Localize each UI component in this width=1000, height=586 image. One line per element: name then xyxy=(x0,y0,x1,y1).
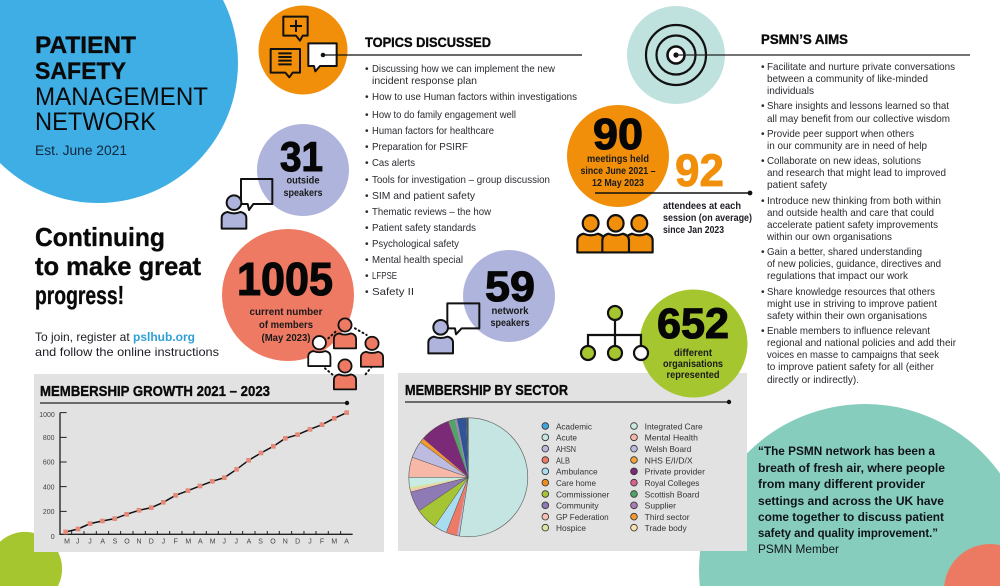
legend: Community xyxy=(556,501,599,511)
topics heading: TOPICS DISCUSSED xyxy=(365,35,491,50)
aims list: patient safety xyxy=(767,180,828,191)
aims list: • xyxy=(761,129,765,140)
title: MANAGEMENT xyxy=(35,83,208,111)
stat: 92 attendees: attendees at each xyxy=(663,201,741,212)
legend: Mental Health xyxy=(645,433,698,443)
line chart: 800 xyxy=(43,435,55,442)
quote: settings and across the UK have xyxy=(758,494,944,508)
topics list: • xyxy=(365,175,369,186)
heading: membership by sector xyxy=(405,382,731,404)
line chart: 600 xyxy=(43,460,55,467)
stat: 92 attendees xyxy=(595,145,752,236)
topics list: Preparation for PSIRF xyxy=(372,142,468,153)
legend: Trade body xyxy=(645,523,687,533)
quote: PSMN Member xyxy=(758,542,839,556)
aims list: • xyxy=(761,101,765,112)
heading: membership growth: MEMBERSHIP GROWTH 2021 – 2023 xyxy=(40,383,270,400)
aims list xyxy=(761,62,957,386)
topics list: • xyxy=(365,64,369,75)
stat: 59 network speakers: network xyxy=(492,306,529,317)
stat: 1005 members: of members xyxy=(259,320,313,331)
stat: 31 outside speakers xyxy=(222,124,349,229)
quote xyxy=(758,444,945,556)
headline: continuing progress: to make great xyxy=(35,251,201,281)
stat: 90 meetings: 12 May 2023 xyxy=(592,178,644,189)
icon: speech bubbles xyxy=(271,17,337,77)
line chart: F xyxy=(320,538,324,545)
topics list: SIM and patient safety xyxy=(372,191,476,202)
legend: Commissioner xyxy=(556,489,609,499)
stat: 90 meetings xyxy=(567,105,669,207)
stat: 59 network speakers xyxy=(428,250,555,353)
topics list: Discussing how we can implement the new xyxy=(372,64,556,75)
topics list xyxy=(365,64,577,298)
line chart: M xyxy=(185,538,191,545)
aims heading: PSMN’S AIMS xyxy=(761,32,848,47)
stat: 652 organisations xyxy=(640,290,748,398)
background circle: salmon xyxy=(944,544,1000,586)
title: Est. June 2021 xyxy=(35,143,127,158)
aims list: and research that might lead to improved xyxy=(767,168,946,179)
pie chart xyxy=(409,418,528,537)
topics list: • xyxy=(365,255,369,266)
stat: 31 outside speakers: outside xyxy=(286,176,320,186)
legend: Hospice xyxy=(556,523,586,533)
legend: GP Federation xyxy=(556,512,609,522)
aims list: • xyxy=(761,287,765,298)
stat: 1005 members: (May 2023) xyxy=(262,333,310,344)
topics list: Patient safety standards xyxy=(372,223,476,234)
title xyxy=(35,32,208,158)
aims list: • xyxy=(761,62,765,73)
line chart: 1000 xyxy=(39,412,55,419)
stat: 92 attendees: session (on average) xyxy=(663,213,752,224)
legend: ALB xyxy=(556,455,570,465)
line chart: A xyxy=(344,538,349,545)
stat: 59 network speakers: speakers xyxy=(490,318,530,329)
stat: 1005 members: 1005 xyxy=(237,253,333,305)
topics list: • xyxy=(365,126,369,137)
aims list: regulations that impact our work xyxy=(767,271,909,282)
stat: 31 outside speakers: speakers xyxy=(284,188,323,199)
stat: 90 meetings: meetings held xyxy=(587,154,649,165)
legend: Royal Colleges xyxy=(645,478,700,488)
line chart: M xyxy=(64,538,70,545)
aims list: • xyxy=(761,156,765,167)
join instructions: and follow the online instructions xyxy=(35,345,219,359)
line chart: N xyxy=(136,538,142,545)
aims list: individuals xyxy=(767,86,814,97)
background circle: blue xyxy=(0,0,238,203)
line chart: J xyxy=(76,538,79,545)
legend: Care home xyxy=(556,478,596,488)
line chart: D xyxy=(149,538,154,545)
topics list: incident response plan xyxy=(372,76,477,87)
line chart: J xyxy=(88,538,92,545)
stat: 90 meetings: 90 xyxy=(593,110,643,159)
topics list: How to use Human factors within investigations xyxy=(372,92,577,103)
line chart: S xyxy=(258,538,263,545)
aims list: all may benefit from our collective wisdom xyxy=(767,114,950,125)
stat: 31 outside speakers: 31 xyxy=(280,133,323,180)
aims list: voices en masse to campaigns that seek xyxy=(767,350,940,361)
stat: 92 attendees: 92 xyxy=(675,145,724,196)
aims list: to improve patient safety for all (either xyxy=(767,362,935,373)
topics list: • xyxy=(365,158,369,169)
line chart: A xyxy=(247,538,252,545)
stat: 92 attendees: since Jan 2023 xyxy=(663,225,724,236)
aims list: directly or indirectly). xyxy=(767,375,859,386)
quote: from many different provider xyxy=(758,477,925,491)
line chart: J xyxy=(235,538,238,545)
title: SAFETY xyxy=(35,58,126,85)
stat: 59 network speakers: 59 xyxy=(485,263,535,311)
legend: AHSN xyxy=(556,444,576,454)
title: PATIENT xyxy=(35,32,136,59)
aims list: Collaborate on new ideas, solutions xyxy=(767,156,921,167)
topics list: Safety II xyxy=(372,287,414,298)
headline: continuing progress: progress! xyxy=(35,280,124,310)
aims list: Gain a better, shared understanding xyxy=(767,247,922,258)
line chart: J xyxy=(162,538,165,545)
topics list: • xyxy=(365,287,369,298)
topics list: How to do family engagement well xyxy=(372,110,516,121)
icon: network of people xyxy=(308,318,383,389)
aims list: accelerate patient safety improvements xyxy=(767,220,938,231)
legend: NHS E/I/D/X xyxy=(645,455,693,465)
join instructions: To join, register at pslhub.org xyxy=(35,330,195,344)
topics list: • xyxy=(365,142,369,153)
heading: membership growth xyxy=(40,383,349,405)
legend xyxy=(542,421,705,533)
aims list: Introduce new thinking from both within xyxy=(767,196,941,207)
legend: Third sector xyxy=(645,512,690,522)
aims target icon xyxy=(627,6,725,104)
topics list: • xyxy=(365,92,369,103)
line chart: 400 xyxy=(43,484,55,491)
topics list: • xyxy=(365,223,369,234)
aims list: within our own organisations xyxy=(766,232,892,243)
topics list: • xyxy=(365,191,369,202)
topics list: Psychological safety xyxy=(372,239,460,250)
topics list: Tools for investigation – group discussion xyxy=(372,175,550,186)
aims list: safety within their own organisations xyxy=(767,311,927,322)
line chart: S xyxy=(113,538,118,545)
aims list: Provide peer support when others xyxy=(767,129,914,140)
topics list: Mental health special xyxy=(372,255,463,266)
stat: 1005 members: current number xyxy=(250,307,322,318)
icon: organisation tree xyxy=(581,306,648,360)
aims list: in our community are in need of help xyxy=(767,141,927,152)
background circle: teal xyxy=(699,404,1000,586)
headline: continuing progress: Continuing xyxy=(35,222,165,252)
stat: 1005 members xyxy=(222,229,354,361)
aims list: might use in striving to improve patient xyxy=(767,299,937,310)
line chart: O xyxy=(270,538,276,545)
join instructions xyxy=(35,330,219,359)
icon: network speaker with bubble xyxy=(428,303,479,353)
stat: 652 organisations: 652 xyxy=(657,300,729,348)
aims list: regional and national policies and add their xyxy=(767,338,957,349)
icon: speaker with bubble xyxy=(222,179,272,229)
topics list: • xyxy=(365,110,369,121)
topics list: • xyxy=(365,207,369,218)
aims list: • xyxy=(761,326,765,337)
stat: 90 meetings: since June 2021 – xyxy=(580,166,656,177)
legend: Academic xyxy=(556,421,593,431)
legend: Integrated Care xyxy=(645,421,703,431)
topics list: LFPSE xyxy=(372,271,397,282)
legend: Private provider xyxy=(645,467,705,477)
topics list: Cas alerts xyxy=(372,158,415,169)
line chart: J xyxy=(308,538,312,545)
line chart xyxy=(39,410,353,545)
line chart: J xyxy=(223,538,226,545)
legend: Ambulance xyxy=(556,467,598,477)
line chart: 0 xyxy=(51,534,55,541)
aims list: Enable members to influence relevant xyxy=(767,326,930,337)
topics list: • xyxy=(365,271,369,282)
legend: Welsh Board xyxy=(645,444,691,454)
topics list: • xyxy=(365,239,369,250)
quote: “The PSMN network has been a xyxy=(758,444,935,458)
topics list: Human factors for healthcare xyxy=(372,126,494,137)
line chart: M xyxy=(210,538,216,545)
aims list: Share insights and lessons learned so that xyxy=(767,101,949,112)
aims list: Share knowledge resources that others xyxy=(767,287,935,298)
panel: membership by sector xyxy=(398,373,747,551)
line chart: A xyxy=(198,538,203,545)
stat: 652 organisations: organisations xyxy=(663,359,723,370)
topics heading xyxy=(321,35,582,57)
line chart: O xyxy=(124,538,130,545)
stat: 652 organisations: represented xyxy=(666,370,720,381)
aims list: Facilitate and nurture private conversations xyxy=(767,62,955,73)
panel: membership growth xyxy=(34,374,384,552)
line chart: 200 xyxy=(43,509,55,516)
stat: 652 organisations: different xyxy=(674,348,713,359)
topics list: Thematic reviews – the how xyxy=(372,207,492,218)
heading: membership by sector: MEMBERSHIP BY SECTOR xyxy=(405,382,568,399)
legend: Supplier xyxy=(645,501,676,511)
aims list: and outside health and care that could xyxy=(767,208,934,219)
title: NETWORK xyxy=(35,108,156,136)
quote: come together to discuss patient xyxy=(758,510,944,524)
topics icon circle xyxy=(258,6,348,94)
aims list: between a community of like-minded xyxy=(767,74,928,85)
aims list: • xyxy=(761,247,765,258)
headline: continuing progress xyxy=(35,222,201,310)
icon: group of attendees xyxy=(577,215,653,252)
line chart: N xyxy=(283,538,288,545)
line chart: M xyxy=(331,538,337,545)
line chart: A xyxy=(100,538,105,545)
quote: breath of fresh air, where people xyxy=(758,461,945,475)
background circle: green xyxy=(0,532,62,586)
aims list: • xyxy=(761,196,765,207)
legend: Scottish Board xyxy=(645,489,699,499)
line chart: D xyxy=(295,538,300,545)
quote: safety and quality improvement.” xyxy=(758,526,938,540)
aims list: of new policies, guidance, directives and xyxy=(767,259,941,270)
line chart: F xyxy=(174,538,178,545)
legend: Acute xyxy=(556,433,577,443)
